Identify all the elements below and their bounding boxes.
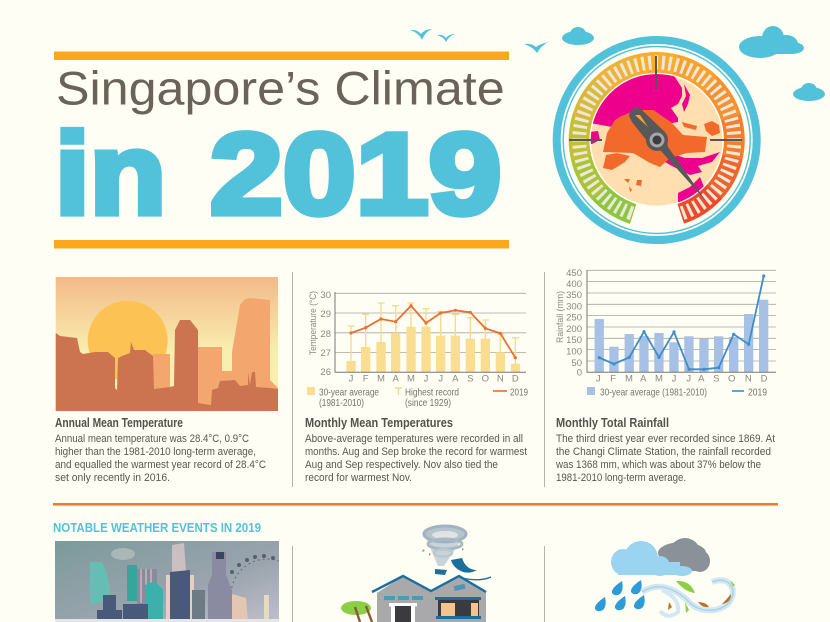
chart: rainfall: M [655, 374, 663, 384]
chart: temperature: S [467, 374, 473, 384]
text: annual summary [55, 433, 266, 484]
chart: temperature: M [377, 374, 385, 384]
icon: wind swirl with leaves [642, 580, 735, 616]
panel: annual mean temperature [55, 277, 278, 484]
gauge illustration [547, 30, 766, 250]
chart: rainfall: F [610, 374, 616, 384]
chart: temperature: A [393, 374, 400, 384]
icon: birds [410, 29, 548, 53]
chart: rainfall: N [745, 374, 752, 384]
chart: temperature: Highest record [405, 386, 459, 398]
chart: rainfall: 30-year average (1981-2010) [600, 386, 707, 398]
icon: blue cloud [611, 541, 692, 576]
chart: rainfall: J [596, 374, 601, 384]
chart: temperature: 2019 [510, 386, 528, 398]
chart: temperature: D [512, 374, 519, 384]
chart: temperature: A [452, 374, 459, 384]
chart: rainfall: D [761, 374, 768, 384]
title: in 2019: 2019 [210, 110, 501, 239]
gauge needle [629, 108, 706, 201]
icon: cloud small left [562, 27, 594, 45]
text: temperature summary: record for warmest Nov. [305, 472, 412, 484]
chart: temperature: M [407, 374, 415, 384]
icon: tornado [422, 526, 491, 580]
icon: house [372, 576, 486, 622]
panel: monthly total rainfall [555, 268, 776, 484]
chart: rainfall: 250 [566, 312, 582, 324]
text: rainfall summary [555, 433, 775, 484]
chart: temperature: O [482, 374, 489, 384]
chart: rainfall: 2019 [748, 386, 767, 398]
text: annual summary: Annual mean temperature was 28.4°C, 0.9°C [55, 433, 249, 445]
chart: rainfall: O [728, 374, 735, 384]
chart: temperature: (1981-2010) [319, 397, 364, 409]
title: in 2019: in [55, 110, 166, 238]
text: temperature summary: months. Aug and Sep broke the record for warmest [305, 446, 527, 458]
chart: temperature: F [363, 374, 369, 384]
chart: temperature: Temperature (°C) [308, 291, 319, 355]
text: rainfall summary: 1981-2010 long-term average. [556, 472, 686, 484]
chart: rainfall: 300 [566, 302, 582, 312]
chart: rainfall: J [672, 374, 677, 384]
chart: rainfall: A [640, 374, 647, 384]
chart: rainfall: 100 [566, 346, 582, 358]
chart: temperature: J [349, 374, 354, 384]
chart: temperature: J [438, 374, 443, 384]
chart: rainfall: 50 [571, 358, 582, 369]
chart: rainfall: S [713, 374, 719, 384]
text: temperature summary [305, 433, 527, 484]
chart: rainfall: 400 [566, 279, 582, 290]
chart: temperature: 30-year average [319, 386, 379, 398]
chart: rainfall: 150 [566, 335, 582, 346]
icon: windblown trees [341, 601, 372, 622]
chart: rainfall: Rainfall (mm) [555, 291, 566, 343]
map: world regions [588, 70, 720, 207]
chart: rainfall [555, 268, 776, 398]
heading: monthly total rainfall: Monthly Total Rainfall [556, 416, 669, 430]
chart: temperature: 26 [320, 367, 331, 378]
chart: temperature: J [424, 374, 429, 384]
title block [54, 52, 509, 248]
text: temperature summary: Aug and Sep respectively. Nov also tied the [305, 459, 498, 471]
chart: rainfall: 200 [566, 324, 582, 335]
icon: cloud large [739, 26, 804, 58]
text: rainfall summary: The third driest year ever recorded since 1869. At [556, 433, 775, 445]
text: annual summary: and equalled the warmest year record of 28.4°C [55, 459, 266, 471]
text: annual summary: higher than the 1981-2010 long-term average, [55, 446, 256, 458]
text: temperature summary: Above-average temperatures were recorded in all [305, 433, 523, 445]
chart: temperature: 30 [320, 290, 331, 301]
chart: rainfall: 0 [577, 368, 582, 378]
chart: rainfall: 350 [566, 290, 582, 301]
text: rainfall summary: was 1368 mm, which was about 37% below the [555, 459, 761, 471]
chart: rainfall: M [625, 374, 633, 384]
icon: grey cloud [658, 538, 710, 572]
chart: temperature: 27 [320, 348, 331, 359]
icon: cloud small right [793, 83, 825, 101]
chart: temperature: N [497, 374, 504, 384]
chart: temperature: 28 [320, 329, 331, 340]
chart: temperature: (since 1929) [405, 397, 451, 409]
panel: monthly mean temperatures [305, 290, 528, 484]
title: in 2019 [55, 110, 501, 239]
chart: rainfall: 450 [566, 268, 582, 279]
illustration: sunset skyline [56, 277, 278, 411]
illustration: rain and wind [595, 538, 735, 616]
chart: rainfall: J [686, 374, 691, 384]
chart: temperature: 29 [320, 309, 331, 320]
chart: temperature [307, 290, 528, 409]
gauge tick marks [569, 56, 742, 140]
illustration: hazy city skyline [55, 541, 303, 622]
text: annual summary: set only recently in 2016. [55, 472, 170, 484]
heading: annual mean temperature: Annual Mean Temperature [55, 416, 183, 430]
illustration: tornado and house [341, 526, 491, 622]
title: Singapore's Climate: Singapore’s Climate [56, 63, 505, 115]
icon: rain drops [595, 580, 645, 611]
heading: notable weather events: NOTABLE WEATHER EVENTS IN 2019 [53, 520, 261, 535]
heading: monthly mean temperatures: Monthly Mean Temperatures [305, 416, 453, 430]
chart: rainfall: A [698, 374, 705, 384]
text: rainfall summary: the Changi Climate Station, the rainfall recorded [556, 446, 771, 458]
